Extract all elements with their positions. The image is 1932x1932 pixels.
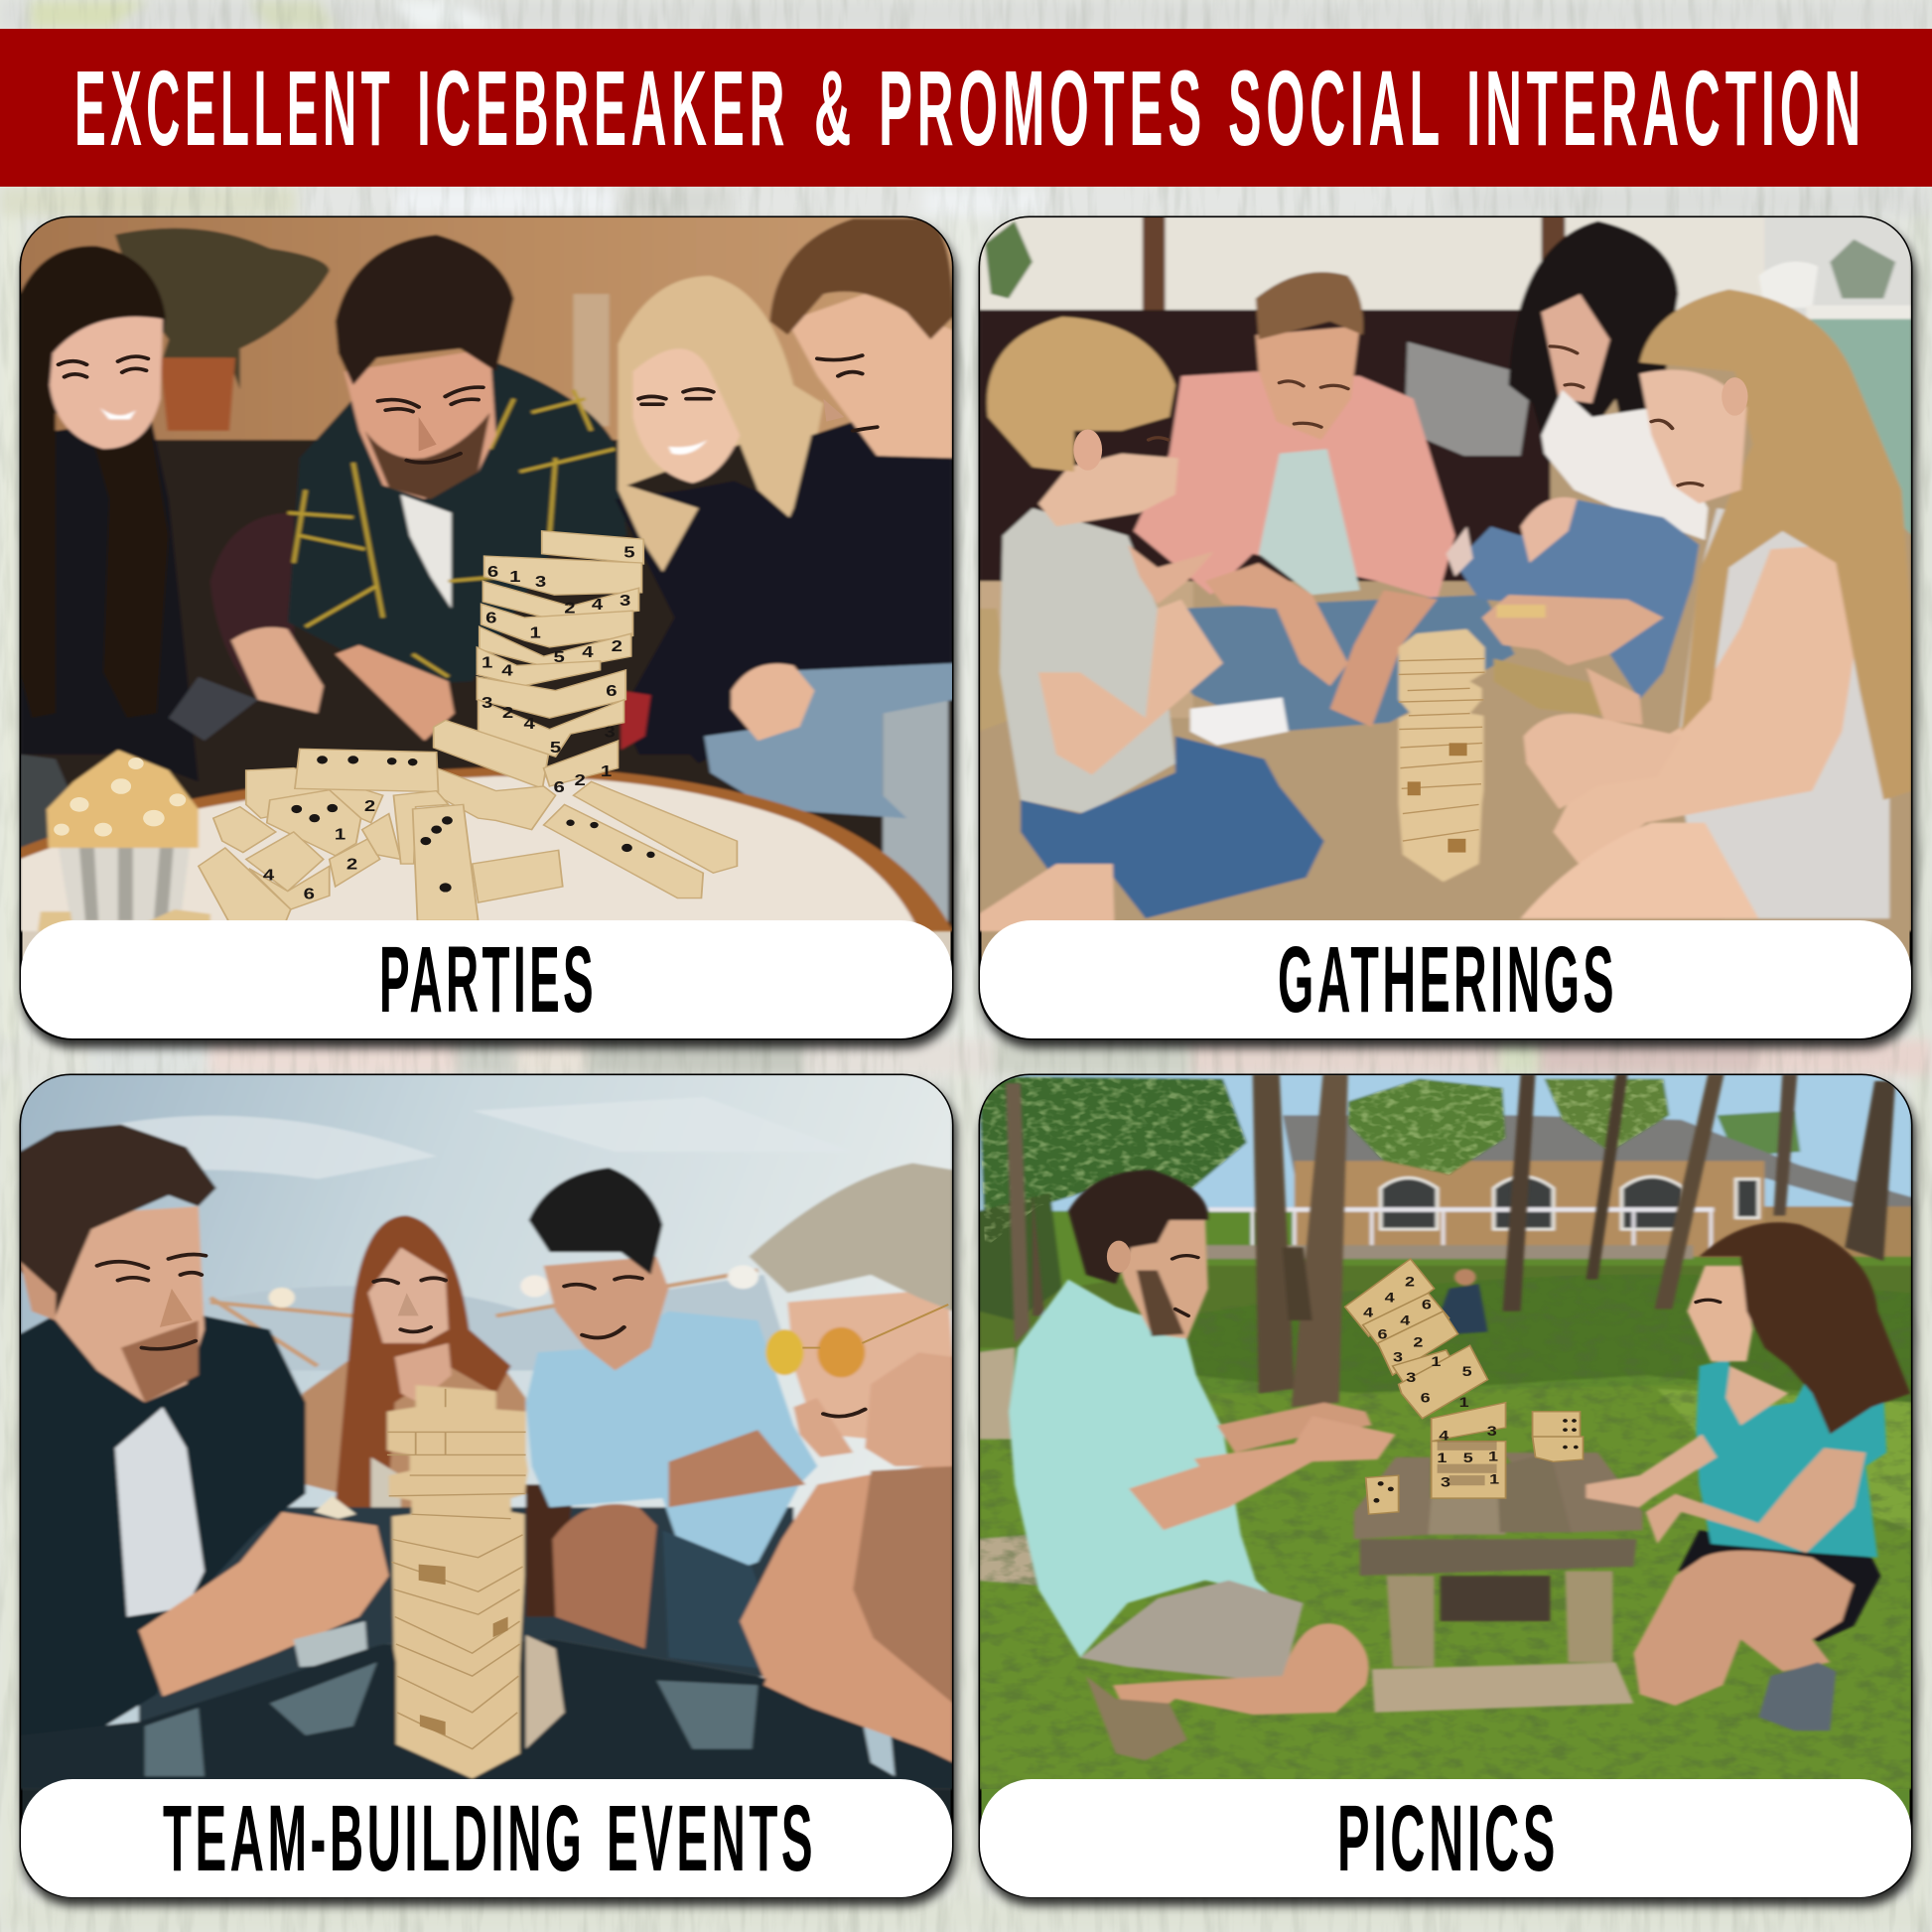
photo: friends playing blocks at a party: 1 [601, 762, 612, 779]
block spots and numbers [291, 756, 655, 893]
tower block lines [1399, 658, 1485, 841]
photo: friends playing blocks at a party: 2 [502, 704, 513, 722]
photo: outdoor game on a picnic table: 1 [1431, 1355, 1442, 1369]
photo: friends playing blocks at a party: 4 [524, 715, 535, 733]
facial features [1173, 1256, 1720, 1315]
photo: family playing on rug [979, 216, 1912, 931]
man right [668, 422, 953, 763]
photo: friends playing blocks at a party: 3 [535, 573, 546, 590]
grass texture [979, 1074, 1912, 1789]
tower [387, 1385, 528, 1778]
photo: outdoor game on a picnic table: 2 [1413, 1335, 1424, 1350]
canopy light [979, 1074, 1912, 1257]
woman middle [303, 1357, 526, 1530]
table [1354, 1452, 1642, 1539]
photo: friends playing blocks at a party: 1 [509, 568, 520, 585]
man center [288, 362, 626, 686]
title: SOCIAL [1228, 48, 1444, 168]
photo: friends playing blocks at a party: 5 [553, 648, 565, 666]
facial features [1149, 346, 1702, 485]
tower block lines [387, 1389, 526, 1749]
photo: outdoor game on a picnic table: 1 [1437, 1451, 1448, 1466]
label: parties: PARTIES [379, 927, 597, 1033]
stacked blocks [1345, 1259, 1583, 1514]
photo: outdoor game on a picnic table: 1 [1459, 1396, 1469, 1411]
photo: outdoor game on a picnic table: 3 [1393, 1350, 1403, 1365]
photo: friends playing blocks at a party: 1 [530, 624, 541, 641]
photo: friends playing blocks at a party: 5 [623, 544, 635, 561]
photo: outdoor game on a picnic table: 4 [1363, 1306, 1373, 1320]
label: team-building events [21, 1779, 952, 1897]
man [1134, 371, 1455, 600]
photo: friends playing blocks at a party: 3 [482, 694, 492, 711]
photo: friends playing blocks at a party: 2 [564, 600, 576, 617]
label: parties [21, 920, 952, 1038]
photo: friends playing blocks at a party: 1 [335, 826, 345, 843]
photo: friends playing blocks at a party: 6 [606, 682, 618, 700]
photo: outdoor game on a picnic table: 1 [1489, 1472, 1499, 1487]
facial features [59, 355, 877, 463]
panel: gatherings [979, 216, 1912, 1038]
photo: outdoor game on a picnic table: 6 [1422, 1298, 1432, 1312]
man [1009, 1280, 1271, 1658]
woman [1509, 221, 1678, 451]
photo: friends playing blocks at a party: 3 [604, 724, 616, 741]
photo: outdoor game on a picnic table: 3 [1441, 1475, 1450, 1490]
trunks [1253, 1074, 1295, 1393]
table [20, 767, 953, 931]
photo: friends playing blocks at a party: 4 [592, 596, 603, 613]
photo: friends playing blocks at a party: 2 [574, 771, 586, 789]
girl [1675, 508, 1889, 918]
photo: friends playing blocks at a party: 1 [482, 654, 492, 671]
photo: outdoor game on a picnic table: 3 [1406, 1371, 1416, 1385]
woman left [21, 754, 69, 848]
man three [526, 1484, 574, 1616]
boy [1000, 508, 1175, 814]
label: gatherings [980, 920, 1911, 1038]
facial features [97, 1254, 865, 1417]
photo: outdoor game on a picnic table: 6 [1377, 1327, 1388, 1342]
photo: outdoor game on a picnic table: 5 [1462, 1365, 1472, 1379]
title: & [814, 48, 856, 168]
photo: friends playing blocks at a party: 6 [553, 778, 565, 795]
title banner [0, 29, 1932, 187]
popcorn [47, 750, 199, 848]
photo: friends playing blocks at a party: 4 [263, 867, 274, 884]
photo: friends playing blocks at a party: 3 [620, 592, 630, 610]
panel: picnics [979, 1074, 1912, 1897]
photo: outdoor game on a picnic table: 4 [1400, 1313, 1410, 1328]
photo: friends playing blocks at a party: 6 [487, 563, 498, 580]
title: EXCELLENT [74, 48, 394, 168]
wood blocks [199, 531, 737, 931]
popcorn kernels [54, 758, 186, 837]
photo: friends playing blocks at a party: 4 [582, 643, 594, 660]
photo: outdoor game on a picnic table: 1 [1488, 1449, 1498, 1464]
sunglasses frame [802, 1305, 948, 1348]
title: PROMOTES [879, 48, 1206, 168]
photo: friends playing blocks at a party: 4 [501, 662, 513, 679]
photo: outdoor game on a picnic table: 4 [1385, 1291, 1395, 1306]
label: team-building events: TEAM-BUILDING EVENTS [163, 1786, 816, 1891]
panel: team-building events [20, 1074, 953, 1897]
photo: friends playing blocks at a party: 6 [485, 610, 496, 626]
tower [1399, 629, 1485, 882]
photo: friends around a glass table [20, 1074, 953, 1789]
photo: outdoor game on a picnic table [979, 1074, 1912, 1789]
blonde woman [616, 481, 793, 755]
panel: parties [20, 216, 954, 1038]
photo: friends playing blocks at a party: 6 [304, 886, 315, 902]
photo: outdoor game on a picnic table: 3 [1487, 1425, 1497, 1440]
table [20, 1639, 953, 1789]
photo: outdoor game on a picnic table: 6 [1421, 1391, 1431, 1406]
bystander [1438, 1284, 1488, 1334]
label text: PICNICS [1337, 1786, 1559, 1891]
photo: friends playing blocks at a party: 2 [346, 856, 357, 873]
title: ICEBREAKER [417, 48, 789, 168]
photo: outdoor game on a picnic table: 5 [1463, 1451, 1473, 1466]
photo: outdoor game on a picnic table: 4 [1439, 1429, 1449, 1444]
photo: friends playing blocks at a party: 2 [612, 637, 622, 655]
photo: outdoor game on a picnic table: 2 [1405, 1275, 1415, 1290]
label: picnics [980, 1779, 1911, 1897]
arm over table [763, 1621, 953, 1762]
photo: friends playing blocks at a party [20, 216, 954, 931]
photo: friends playing blocks at a party: 2 [364, 797, 375, 815]
girl [1678, 1530, 1880, 1642]
man left [20, 1311, 306, 1739]
woman right [740, 1461, 953, 1758]
photo: friends playing blocks at a party: 5 [550, 739, 561, 756]
